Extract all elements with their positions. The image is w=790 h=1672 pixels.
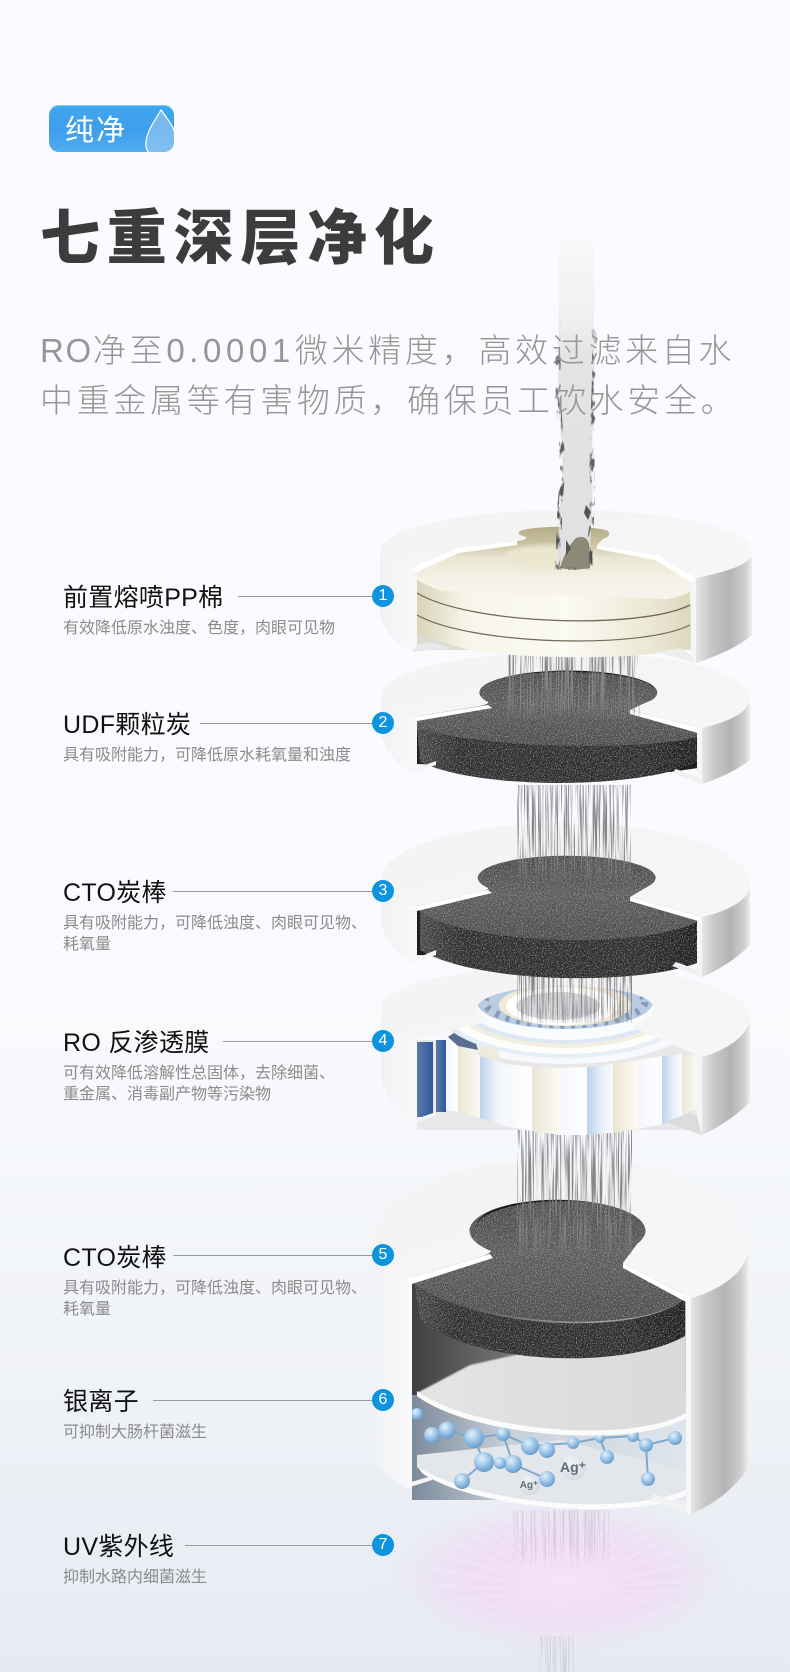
stream dark glints [566, 505, 591, 556]
lead text: 中重金属等有害物质，确保员工饮水安全。 [40, 382, 737, 418]
label 3 heading: CTO炭棒 [63, 879, 167, 907]
label 5 description: 具有吸附能力，可降低浊度、肉眼可见物、 [63, 1280, 367, 1297]
tag text: 纯净 [65, 115, 127, 147]
carbon top [420, 848, 697, 940]
UV glow [424, 1510, 698, 1636]
disc 5: CTO carbon, silver ion chamber [392, 1200, 748, 1514]
title: 七重深层净化 [40, 205, 441, 272]
top annulus [380, 510, 752, 578]
Ag+ ions: Ag⁺ [520, 1480, 538, 1491]
disc 1: melt-blown PP cotton [380, 510, 752, 663]
number badge 2: 2 [379, 714, 387, 731]
carbon top [417, 664, 697, 746]
label 4: RO membrane [63, 1029, 335, 1103]
label 3: CTO carbon [63, 879, 367, 953]
cut edge highlights [412, 541, 517, 572]
inner chamber [417, 905, 698, 962]
membrane spiral rings [425, 956, 705, 1064]
top annulus [374, 1159, 748, 1298]
outer right wall [702, 887, 750, 977]
carbon side [420, 912, 697, 978]
label 7 heading: UV紫外线 [63, 1533, 174, 1561]
illustration: exploded filter stack [380, 270, 752, 1672]
membrane hub [516, 992, 600, 1020]
water falling into disc 3 [517, 785, 632, 880]
top annulus [381, 823, 750, 917]
label 4 heading: RO 反渗透膜 [63, 1029, 210, 1057]
label 5 heading: CTO炭棒 [63, 1244, 167, 1272]
label 3 description [63, 914, 367, 953]
stream glass base [560, 537, 590, 570]
label 6 heading: 银离子 [63, 1388, 139, 1416]
label 5 description [63, 1279, 367, 1318]
carbon block top [415, 1190, 685, 1322]
inner chamber [417, 712, 698, 772]
label 2 heading: UDF颗粒炭 [63, 711, 191, 739]
outer right wall [691, 1248, 748, 1514]
number badge 6: 6 [379, 1391, 387, 1408]
outer left wall [381, 697, 413, 773]
number badge 3: 3 [379, 882, 387, 899]
label 3 description: 具有吸附能力，可降低浊度、肉眼可见物、 [63, 915, 367, 932]
connector 3 [173, 891, 373, 892]
raised centre ring [504, 545, 596, 569]
upper plate [417, 1335, 686, 1431]
icon: water drop [145, 109, 174, 152]
number badge 1 [372, 585, 394, 607]
label 6: silver ion [63, 1388, 207, 1441]
carbon block side [415, 1285, 685, 1358]
water falling into disc 5 [517, 1130, 632, 1255]
inner chamber [416, 570, 692, 650]
label 3 description: 耗氧量 [63, 936, 111, 953]
outer left wall [381, 880, 413, 963]
label 1: PP cotton [63, 584, 335, 637]
connector 5 [173, 1255, 373, 1256]
label 4 description: 可有效降低溶解性总固体，去除细菌、 [63, 1065, 335, 1082]
cut edge highlights [413, 705, 492, 721]
label 2: UDF carbon [63, 711, 351, 764]
number badge 7 [372, 1534, 394, 1556]
lead text: RO净至0.0001微米精度，高效过滤来自水 [40, 332, 735, 369]
inner wall strips [407, 1279, 412, 1488]
carbon side [417, 727, 697, 783]
UV-lit water streaks [512, 1510, 610, 1572]
stream edge texture [557, 233, 595, 570]
number badge 7: 7 [379, 1536, 387, 1553]
number badge 4: 4 [379, 1032, 387, 1049]
label 5 description: 耗氧量 [63, 1301, 111, 1318]
outer right wall [696, 557, 752, 663]
number badge 2 [372, 712, 394, 734]
number badge 3 [372, 880, 394, 902]
inner wall strips [412, 568, 417, 652]
inner wall strips [413, 717, 417, 773]
outer left wall [381, 1005, 413, 1120]
outer right wall [702, 700, 750, 784]
outer left wall [374, 1234, 407, 1488]
label 5: CTO carbon [63, 1244, 367, 1318]
number badge 4 [372, 1030, 394, 1052]
top annulus [381, 967, 750, 1057]
lower plate [417, 1440, 686, 1505]
cotton layer 1 [417, 580, 690, 621]
hole rim shadow [476, 1197, 652, 1228]
disc 3: CTO carbon [381, 823, 750, 978]
disc 4: RO membrane [381, 956, 750, 1135]
tag: purity [49, 105, 174, 152]
main water stream [557, 233, 595, 570]
cotton layer 2 [417, 590, 690, 641]
label 4 description: 重金属、消毒副产物等污染物 [63, 1086, 271, 1103]
connector 1 [238, 596, 373, 597]
inner chamber wall [411, 1282, 688, 1400]
molecule chamber back [412, 1395, 686, 1500]
water falling into disc 4 [517, 973, 632, 1023]
label 6 description: 可抑制大肠杆菌滋生 [63, 1424, 207, 1441]
connector 2 [200, 723, 373, 724]
hole rim shadow [476, 668, 654, 690]
cotton layer 3 [417, 600, 690, 657]
number badge 5: 5 [379, 1246, 387, 1263]
water falling into disc 2 [505, 653, 640, 719]
Ag+ ions [518, 1454, 586, 1495]
connector 7 [185, 1545, 373, 1546]
label 2 description: 具有吸附能力，可降低原水耗氧量和浊度 [63, 747, 351, 764]
inner wall strips [413, 907, 417, 963]
lead text [40, 332, 737, 418]
hole rim shadow [476, 850, 654, 872]
lower lips [407, 1476, 432, 1488]
cut edge highlights [413, 890, 492, 911]
Ag+ ions: Ag⁺ [560, 1459, 586, 1475]
label 4 description [63, 1064, 335, 1103]
cut edge highlights [407, 1254, 493, 1284]
number badge 1: 1 [379, 587, 387, 604]
inner wall strips [413, 1040, 417, 1120]
disc 2: UDF granular carbon [381, 652, 750, 784]
label 1 description: 有效降低原水浊度、色度，肉眼可见物 [63, 620, 335, 637]
number badge 5 [372, 1244, 394, 1266]
label 7 description: 抑制水路内细菌滋生 [63, 1569, 207, 1586]
pleat ends visible in the hole [485, 979, 645, 1025]
membrane pleats [446, 1037, 697, 1135]
connector 4 [223, 1041, 373, 1042]
cotton top surface [417, 525, 692, 621]
label 7: UV [63, 1533, 207, 1586]
silver ion molecules [411, 1408, 682, 1489]
outer right wall [702, 1017, 750, 1135]
membrane window [417, 1042, 433, 1117]
bottom water outlet [538, 1636, 575, 1672]
number badge 6 [372, 1389, 394, 1411]
inner chamber [417, 1040, 698, 1130]
label 1 heading: 前置熔喷PP棉 [63, 584, 223, 612]
top annulus [381, 652, 750, 728]
connector 6 [153, 1400, 373, 1401]
outer left wall [380, 552, 412, 652]
